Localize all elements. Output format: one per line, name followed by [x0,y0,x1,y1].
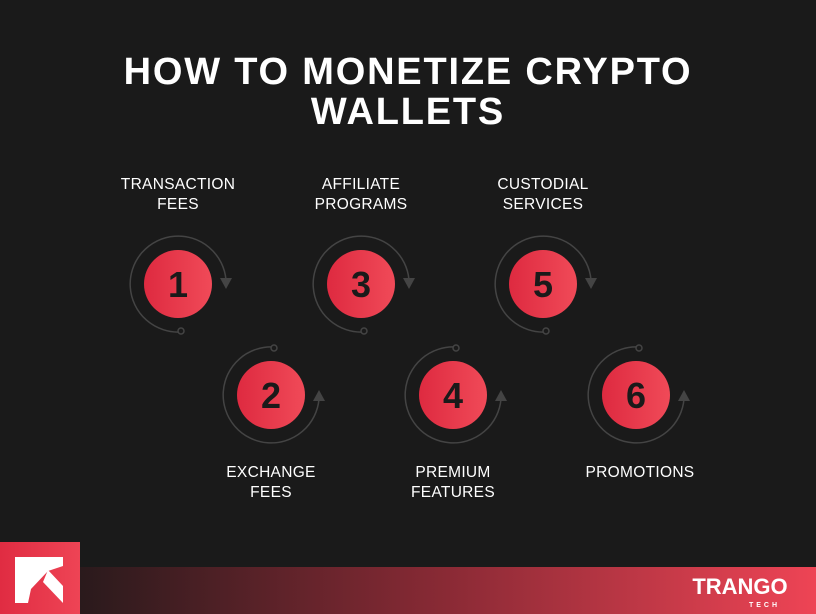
label: transaction fees: FEES [157,196,199,213]
label: premium features: FEATURES [411,484,495,501]
step 4: 4 [443,375,463,416]
label: exchange fees: FEES [250,484,292,501]
label: custodial services: SERVICES [503,196,583,213]
label: premium features [411,464,495,501]
label: custodial services: CUSTODIAL [497,176,589,193]
label: exchange fees [226,464,316,501]
step 2: 2 [261,375,281,416]
brand logo: TECH [749,602,780,609]
step 1: 1 [168,264,188,305]
step 6 [588,345,690,443]
footer bar [80,567,816,614]
step 3 [313,236,415,334]
step 3: 3 [351,264,371,305]
label: promotions: PROMOTIONS [586,464,694,481]
title [124,51,692,133]
label: custodial services [497,176,589,213]
label: affiliate programs: AFFILIATE [322,176,400,193]
label: transaction fees [121,176,235,213]
step 2 [223,345,325,443]
step 5: 5 [533,264,553,305]
label: exchange fees: EXCHANGE [226,464,316,481]
title: WALLETS [311,91,505,133]
logo square [0,542,80,614]
step 6: 6 [626,375,646,416]
label: transaction fees: TRANSACTION [121,176,235,193]
label: affiliate programs [315,176,407,213]
brand logo: TRANGO [692,574,788,599]
label: affiliate programs: PROGRAMS [315,196,407,213]
step 5 [495,236,597,334]
title: HOW TO MONETIZE CRYPTO [124,51,692,93]
step 1 [130,236,232,334]
label: premium features: PREMIUM [415,464,491,481]
step 4 [405,345,507,443]
